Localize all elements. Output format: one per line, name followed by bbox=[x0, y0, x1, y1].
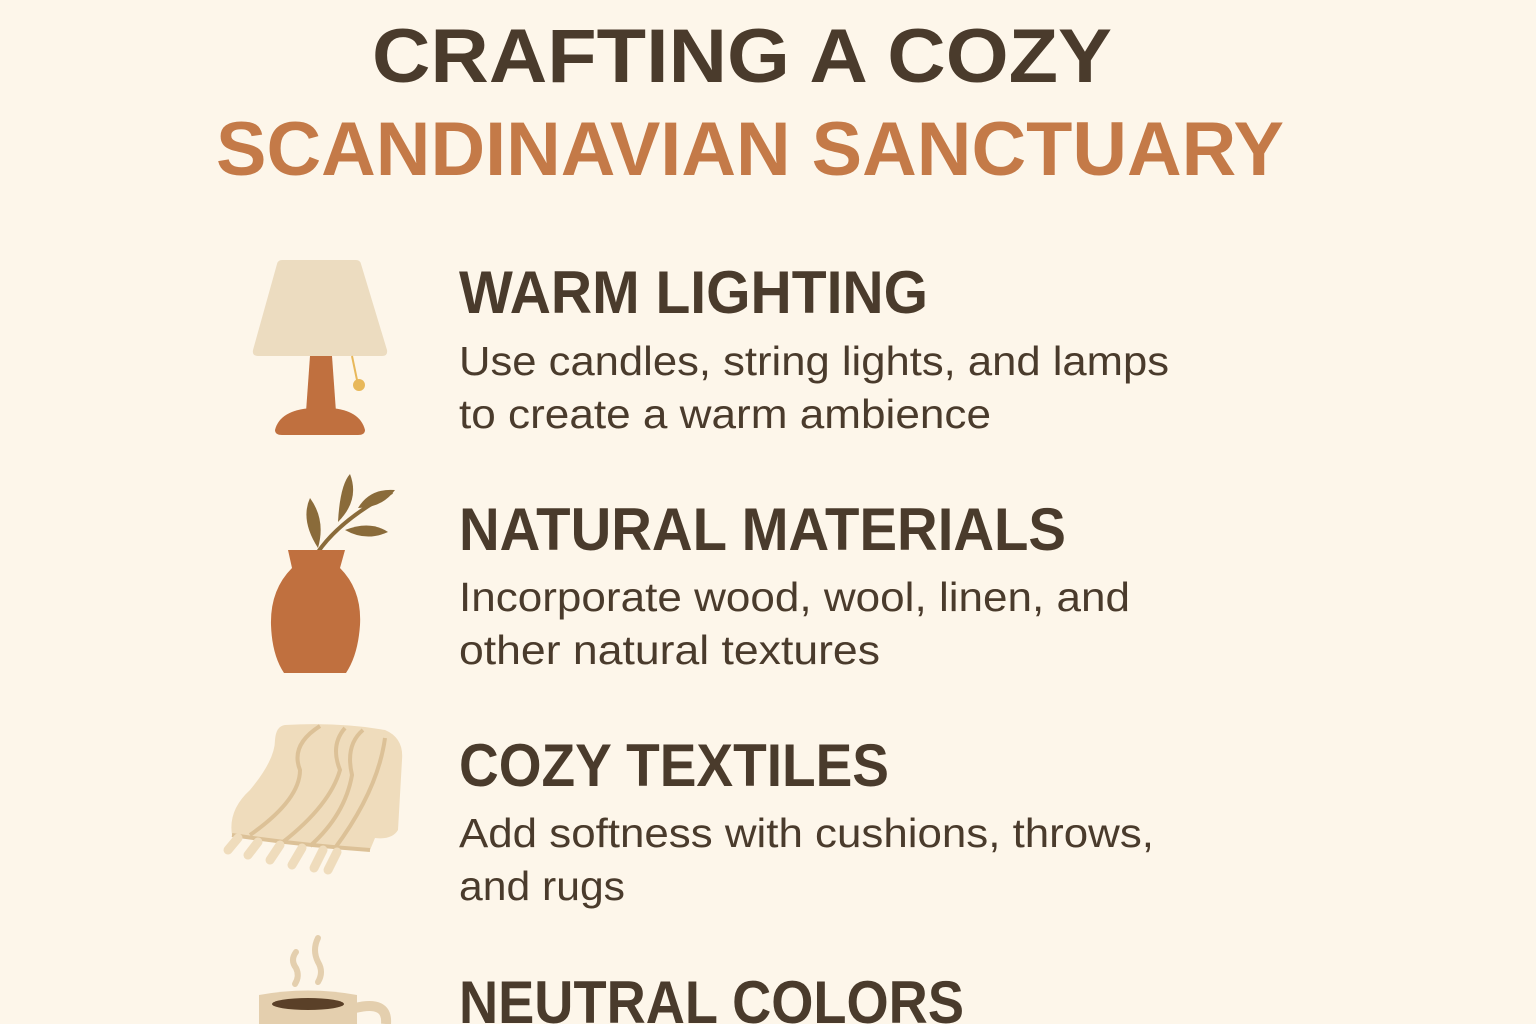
icon: blanket bbox=[228, 724, 402, 870]
section: warm lighting: Use candles, string lights, and lamps bbox=[459, 338, 1169, 384]
section: cozy textiles: COZY TEXTILES bbox=[459, 732, 889, 799]
title: CRAFTING A COZY bbox=[372, 14, 1112, 99]
section: warm lighting bbox=[459, 259, 1169, 437]
section: natural materials bbox=[459, 496, 1130, 673]
icon: vase with leaves bbox=[271, 474, 395, 673]
icon: lamp bbox=[253, 260, 387, 435]
section: natural materials: NATURAL MATERIALS bbox=[459, 496, 1066, 563]
section: cozy textiles bbox=[459, 732, 1154, 909]
section: warm lighting: WARM LIGHTING bbox=[459, 259, 928, 326]
section: natural materials: Incorporate wood, wool, linen, and bbox=[459, 574, 1130, 620]
section: warm lighting: to create a warm ambience bbox=[459, 391, 991, 437]
section: cozy textiles: and rugs bbox=[459, 863, 625, 909]
section: natural materials: other natural textures bbox=[459, 627, 880, 673]
section: cozy textiles: Add softness with cushions, throws, bbox=[459, 810, 1154, 856]
icon: mug bbox=[259, 938, 386, 1024]
title bbox=[216, 14, 1284, 192]
title: SCANDINAVIAN SANCTUARY bbox=[216, 107, 1284, 192]
